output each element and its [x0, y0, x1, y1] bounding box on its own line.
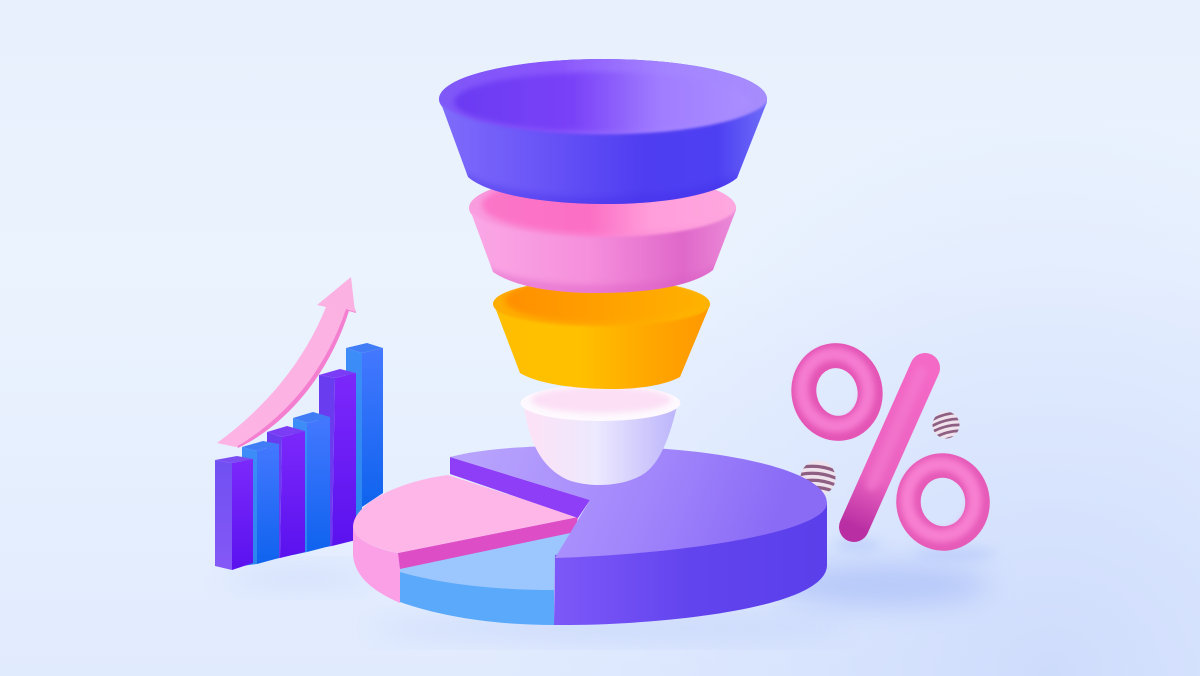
pie slice: main purple with dark slice	[450, 446, 827, 625]
bar 4	[293, 412, 330, 555]
pie chart	[353, 446, 827, 625]
funnel: orange tier	[493, 286, 710, 389]
bar 1	[215, 456, 253, 570]
bar 2	[242, 441, 279, 566]
bar 6	[346, 343, 383, 520]
percent: upper ring	[795, 348, 877, 435]
pie slice: blue	[399, 530, 575, 625]
bar chart	[215, 343, 383, 570]
bar 3	[267, 426, 305, 560]
arrow	[217, 277, 356, 448]
funnel: pink tier	[469, 189, 736, 293]
funnel: white tier	[520, 385, 680, 485]
percent: slash	[854, 368, 925, 527]
percent: lower ring	[903, 461, 981, 542]
bar 5	[319, 369, 356, 548]
floor shadows	[225, 540, 997, 638]
percent sign	[795, 348, 981, 542]
sphere: striped right	[932, 412, 960, 438]
funnel	[435, 54, 771, 485]
sphere: striped left	[800, 460, 836, 494]
pie slice: pink	[353, 475, 578, 603]
funnel: purple tier	[435, 54, 771, 210]
illustration: 3D funnel, pie, bars and percent	[215, 59, 1200, 676]
